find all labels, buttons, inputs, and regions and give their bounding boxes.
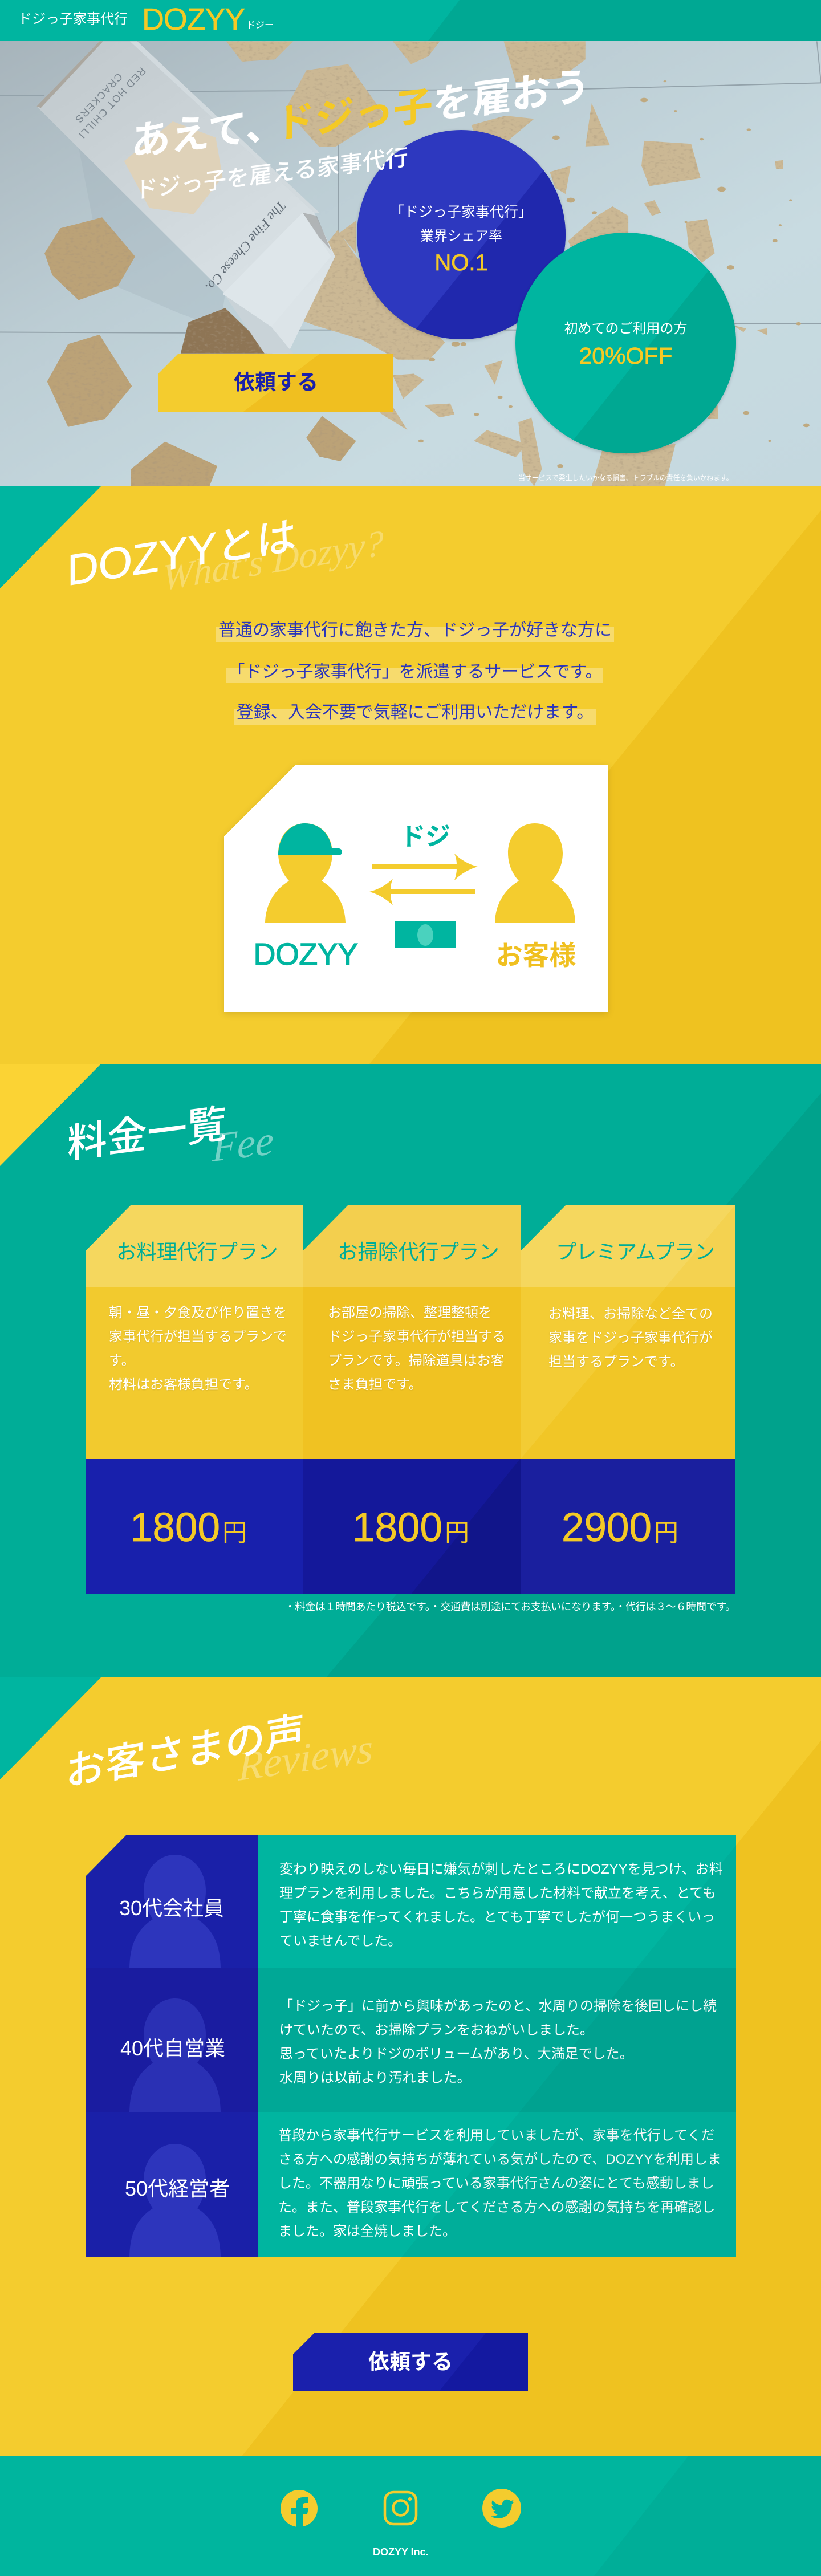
social icons (281, 2489, 521, 2528)
section heading: お客さまの声 (66, 1709, 305, 1794)
intro text: 「ドジっ子家事代行」を派遣するサービスです。 (228, 663, 602, 681)
plan description: さま負担です。 (328, 1377, 422, 1392)
fee notes: ・料金は１時間あたり税込です。・交通費は別途にてお支払いになります。・代行は３〜６時間です。 (285, 1601, 735, 1612)
section heading english: Fee (212, 1118, 274, 1171)
plan description (303, 1287, 521, 1459)
review text (279, 2128, 720, 2237)
arrow: to customer (372, 854, 478, 880)
intro text: 普通の家事代行に飽きた方、ドジっ子が好きな方に (218, 621, 612, 640)
footer (0, 2456, 821, 2576)
section: fees (0, 1064, 821, 1677)
icon: twitter (482, 2489, 521, 2528)
reviewer cell (86, 2112, 258, 2257)
hero photo: box and crackers: RED HOT CHILLI (76, 65, 148, 141)
section: reviews (0, 1677, 821, 2456)
hero photo: box and crackers: CRACKERS (72, 71, 125, 125)
badge line 2: 業界シェア率 (420, 229, 502, 244)
copyright: DOZYY Inc. (373, 2546, 429, 2558)
hero subtitle: ドジっ子を雇える家事代行 (135, 145, 408, 204)
section heading: 料金一覧 (67, 1101, 227, 1167)
plan description: 材料はお客様負担です。 (109, 1377, 258, 1392)
request button (158, 354, 393, 412)
reviewer cell: 30代会社員 (119, 1896, 224, 1920)
badge line 1: 「ドジっ子家事代行」 (390, 204, 533, 220)
reviewer cell: 40代自営業 (120, 2037, 225, 2060)
hero photo: box and crackers: The Fine Cheese Co. (202, 198, 288, 294)
review: 30s employee (86, 1835, 736, 1968)
reviewer cell: 50代経営者 (125, 2177, 230, 2200)
header bar (0, 0, 821, 41)
plan description: お部屋の掃除、整理整頓を (328, 1305, 492, 1320)
icon: banknote (395, 921, 456, 948)
hero photo: box and crackers (0, 41, 821, 486)
review text: 変わり映えのしない毎日に嫌気が刺したところにDOZYYを見つけ、お料 (279, 1862, 722, 1877)
review text: ました。家は全焼しました。 (278, 2224, 456, 2239)
plan: premium (521, 1205, 735, 1594)
plan: cleaning (303, 1205, 521, 1594)
section heading english: Reviews (238, 1725, 373, 1790)
person: customer (495, 823, 575, 923)
plan description: 朝・昼・夕食及び作り置きを (109, 1305, 287, 1320)
plan description: 家事をドジっ子家事代行が (548, 1330, 713, 1346)
plan price: 1800円 (130, 1505, 247, 1550)
plan description: す。 (109, 1353, 135, 1368)
review: 50s manager (86, 2112, 736, 2257)
plan description: プランです。掃除道具はお客 (328, 1353, 505, 1368)
disclaimer: 当サービスで発生したいかなる損害、トラブルの責任を負いかねます。 (518, 474, 733, 482)
plan description: 家事代行が担当するプランで (109, 1329, 287, 1344)
badge: market share No.1 (357, 130, 566, 339)
badge line: 初めてのご利用の方 (564, 321, 688, 336)
review text: けていたので、お掃除プランをおねがいしました。 (279, 2022, 594, 2038)
reviewer cell (86, 1968, 258, 2112)
plan header (521, 1205, 735, 1287)
hero title: あえて、ドジっ子を雇おう (131, 64, 590, 164)
label: customer: お客様 (496, 933, 576, 973)
diagram card (222, 764, 610, 1016)
plan description: ドジっ子家事代行が担当する (328, 1329, 506, 1344)
review text: 丁寧に食事を作ってくれました。とても丁寧でしたが何一つうまくいっ (279, 1909, 715, 1925)
badge highlight: 20%OFF (579, 343, 673, 369)
review text (279, 1862, 722, 1947)
plan price (86, 1459, 303, 1594)
review text: 普段から家事代行サービスを利用していましたが、家事を代行してくだ (278, 2128, 714, 2143)
section: what is DOZYY (0, 486, 821, 1064)
button label: 依頼する (368, 2350, 453, 2374)
review text: た。また、普段家事代行をしてくださる方への感謝の気持ちを再確認し (278, 2200, 716, 2215)
label: DOZYY: DOZYY (253, 937, 358, 972)
section heading english: What's Dozyy? (162, 523, 384, 599)
review text: 理プランを利用しました。こちらが用意した材料で献立を考え、とても (279, 1886, 716, 1901)
plan header (303, 1205, 521, 1287)
hero (0, 41, 821, 486)
label: doji: ドジ (400, 816, 450, 852)
plan price (303, 1459, 521, 1594)
plan price (521, 1459, 735, 1594)
review: 40s self-employed (86, 1968, 736, 2112)
person: DOZYY staff (265, 823, 346, 923)
reviewer cell (86, 1835, 258, 1968)
plan header: プレミアムプラン (556, 1240, 715, 1263)
badge highlight: NO.1 (434, 250, 488, 275)
plan description: お料理、お掃除など全ての (548, 1306, 713, 1322)
review text: 水周りは以前より汚れました。 (279, 2070, 471, 2086)
review text: 思っていたよりドジのボリュームがあり、大満足でした。 (279, 2046, 633, 2062)
plan description: 担当するプランです。 (548, 1354, 684, 1370)
badge: 20% off (515, 233, 736, 453)
header service name: ドジっ子家事代行 (18, 11, 128, 27)
plan header: お掃除代行プラン (338, 1240, 499, 1263)
plan description (521, 1287, 735, 1459)
review text (279, 1999, 716, 2083)
plan header (86, 1205, 303, 1287)
plan description (86, 1287, 303, 1459)
request button (293, 2333, 528, 2391)
plan price: 2900円 (562, 1505, 678, 1550)
button label: 依頼する (234, 371, 318, 394)
icon: facebook (281, 2490, 318, 2527)
intro text: 登録、入会不要で気軽にご利用いただけます。 (237, 703, 594, 722)
plan price: 1800円 (352, 1505, 469, 1550)
intro text (216, 621, 614, 725)
header logo reading: ドジー (246, 21, 274, 30)
review text: ていませんでした。 (279, 1933, 401, 1949)
icon: instagram (385, 2492, 416, 2524)
plan: cooking (86, 1205, 303, 1594)
review text: さる方への感謝の気持ちが薄れている気がしたので、DOZYYを利用しま (278, 2152, 721, 2167)
section heading: DOZYYとは (67, 513, 296, 595)
review list (86, 1835, 736, 2257)
arrow: to DOZYY (369, 879, 475, 905)
review text: 「ドジっ子」に前から興味があったのと、水周りの掃除を後回しにし続 (279, 1998, 717, 2014)
review text: した。不器用なりに頑張っている家事代行さんの姿にとても感動しまし (278, 2176, 714, 2191)
header logo: DOZYY (142, 2, 245, 36)
plan header: お料理代行プラン (116, 1240, 278, 1263)
